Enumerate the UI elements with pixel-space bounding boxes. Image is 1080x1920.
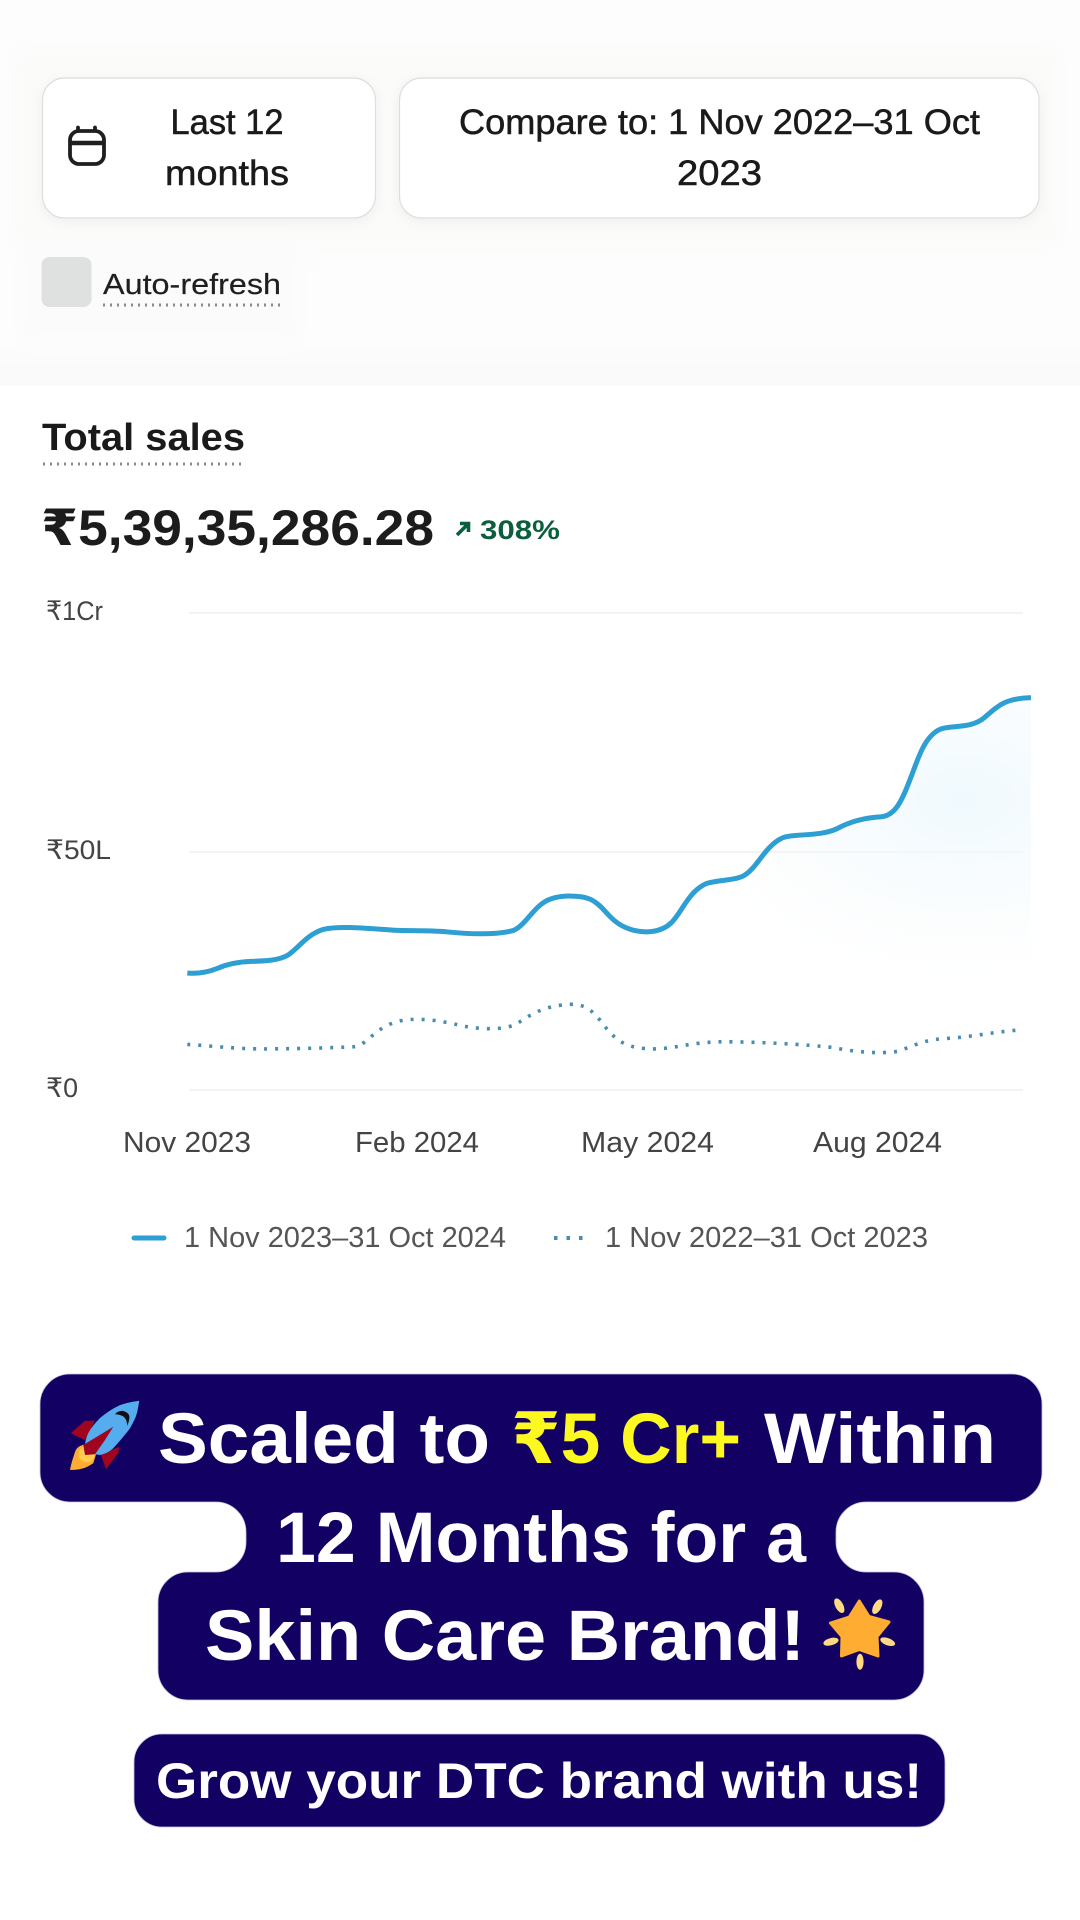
x axis labels: Feb 2024 xyxy=(355,1127,479,1159)
x axis labels: Aug 2024 xyxy=(813,1127,942,1159)
text: headline line 3: Skin Care Brand! xyxy=(205,1597,805,1676)
line: current period xyxy=(187,698,1031,973)
line chart: total sales over time xyxy=(46,596,1031,1254)
x axis labels xyxy=(123,1127,942,1159)
area highlight xyxy=(706,698,1031,992)
date range button: Last 12 xyxy=(170,103,284,142)
y axis labels: ₹1Cr xyxy=(46,596,103,626)
legend: 1 Nov 2022–31 Oct 2023 xyxy=(605,1222,928,1254)
icon: calendar xyxy=(70,128,104,164)
y axis labels xyxy=(46,596,111,1103)
text: headline line 2: 12 Months for a xyxy=(276,1499,807,1578)
text: headline line 1: ₹5 Cr+ xyxy=(511,1400,741,1479)
text: headline line 1 xyxy=(158,1400,996,1479)
icon: glowing star xyxy=(823,1597,896,1670)
heading: total sales: Total sales xyxy=(42,417,245,459)
headline banner xyxy=(40,1374,1042,1700)
date range button xyxy=(42,78,376,218)
panel: date filter controls xyxy=(38,76,1044,307)
icon: rocket xyxy=(70,1401,139,1470)
compare period button xyxy=(400,78,1039,218)
legend xyxy=(134,1222,928,1254)
metric: growth percent xyxy=(457,515,560,545)
x axis labels: Nov 2023 xyxy=(123,1127,251,1159)
y axis labels: ₹50L xyxy=(46,835,111,865)
legend: 1 Nov 2023–31 Oct 2024 xyxy=(184,1222,506,1254)
compare period button: 2023 xyxy=(677,154,762,193)
date range button: months xyxy=(165,154,289,193)
call to action banner: Grow your DTC brand with us! xyxy=(156,1753,922,1809)
line: previous period xyxy=(187,1004,1023,1053)
metric: total sales value: ₹5,39,35,286.28 xyxy=(41,500,434,556)
y axis labels: ₹0 xyxy=(46,1073,78,1103)
compare period button: Compare to: 1 Nov 2022–31 Oct xyxy=(459,103,980,142)
metric: growth percent: 308% xyxy=(480,515,560,545)
x axis labels: May 2024 xyxy=(581,1127,714,1159)
auto-refresh toggle: Auto-refresh xyxy=(103,269,281,301)
text: headline line 1: Scaled to xyxy=(158,1400,490,1479)
call to action banner xyxy=(134,1734,945,1827)
text: headline line 1: Within xyxy=(764,1400,996,1479)
auto-refresh toggle xyxy=(42,257,281,307)
